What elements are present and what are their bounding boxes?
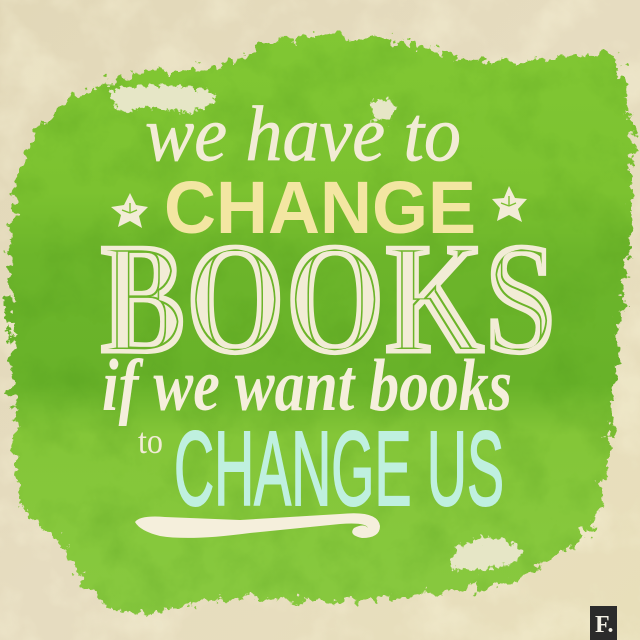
icon: left star (111, 193, 148, 228)
headline: if we want books: if we want books (102, 345, 512, 427)
paper splatter: top centre (368, 98, 398, 122)
swash underline (135, 513, 380, 538)
logo badge (590, 606, 617, 640)
headline: CHANGE: CHANGE (164, 166, 476, 249)
paper splatter: bottom right (450, 536, 525, 572)
text: to: to (138, 421, 163, 461)
paper splatter: top left (104, 84, 220, 114)
logo badge: F. (595, 612, 613, 638)
icon: right star (492, 186, 527, 222)
headline: we have to: we have to (145, 90, 461, 177)
